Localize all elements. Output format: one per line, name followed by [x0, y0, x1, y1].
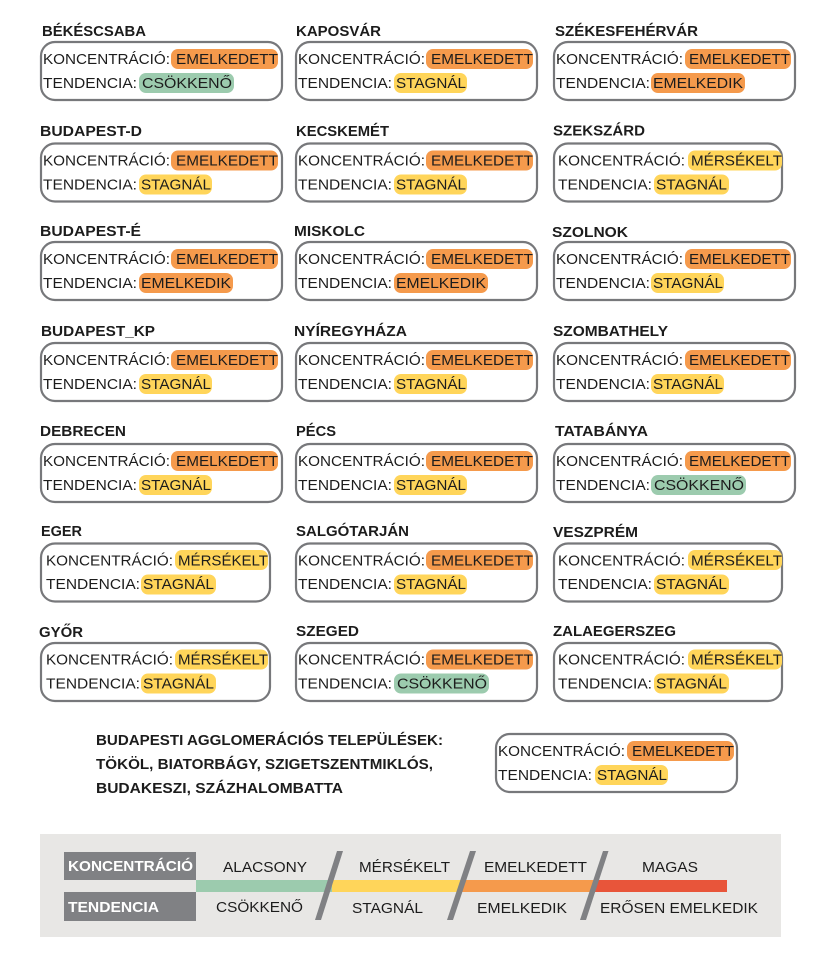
- card: Kecskemét: KECSKEMÉT: [296, 123, 389, 140]
- legend labels: elevated: [477, 859, 587, 917]
- legend labels: moderate: STAGNÁL: [352, 900, 423, 917]
- card: Eger: [41, 524, 270, 602]
- card: Pécs: TENDENCIA:: [298, 477, 392, 494]
- card: Székesfehérvár: TENDENCIA:: [556, 75, 650, 92]
- card: Székesfehérvár: SZÉKESFEHÉRVÁR: [555, 23, 699, 40]
- card: Győr: [39, 623, 270, 701]
- legend row header: koncentráció: KONCENTRÁCIÓ: [68, 857, 193, 875]
- legend row header: koncentráció: [64, 852, 196, 880]
- card: Debrecen: DEBRECEN: [40, 424, 126, 440]
- card: Debrecen: KONCENTRÁCIÓ:: [43, 453, 170, 470]
- card: Tatabánya: TATABÁNYA: [555, 423, 649, 440]
- card: Szeged: [296, 624, 537, 701]
- card: Salgótarján: TENDENCIA:: [298, 576, 392, 593]
- card: Miskolc: MISKOLC: [294, 224, 366, 240]
- card: Pécs: [296, 423, 537, 502]
- legend separators: [315, 851, 608, 920]
- card: Veszprém: STAGNÁL: [656, 576, 727, 593]
- card: Budapest_KP: TENDENCIA:: [43, 376, 137, 393]
- card: Szekszárd: [553, 122, 782, 202]
- legend labels: low: ALACSONY: [223, 859, 307, 876]
- legend row header: tendencia: [64, 892, 196, 921]
- card: Debrecen: STAGNÁL: [141, 477, 211, 494]
- card: Szombathely: KONCENTRÁCIÓ:: [556, 352, 683, 369]
- card: Zalaegerszeg: STAGNÁL: [656, 676, 727, 692]
- card: Salgótarján: SALGÓTARJÁN: [296, 522, 409, 540]
- card: Miskolc: EMELKEDIK: [396, 275, 486, 292]
- card: Budapest-D: [40, 124, 282, 202]
- card: Győr: STAGNÁL: [143, 676, 214, 692]
- card: Győr: KONCENTRÁCIÓ:: [46, 652, 173, 668]
- card: Nyíregyháza: NYÍREGYHÁZA: [294, 323, 408, 340]
- card: Pécs: KONCENTRÁCIÓ:: [298, 453, 425, 470]
- card: Székesfehérvár: EMELKEDETT: [689, 51, 790, 68]
- card: Budapest-D: KONCENTRÁCIÓ:: [43, 152, 170, 170]
- card: Budapest-D: EMELKEDETT: [176, 152, 278, 170]
- card: Budapest-D: STAGNÁL: [141, 176, 211, 194]
- card: Székesfehérvár: KONCENTRÁCIÓ:: [556, 51, 683, 68]
- card: Nyíregyháza: STAGNÁL: [396, 376, 466, 393]
- card: Szolnok: KONCENTRÁCIÓ:: [556, 251, 683, 268]
- card: Békéscsaba: EMELKEDETT: [176, 51, 278, 68]
- card: Szolnok: SZOLNOK: [552, 225, 629, 241]
- card: Eger: EGER: [41, 524, 83, 540]
- card: Budapest_KP: BUDAPEST_KP: [41, 324, 155, 340]
- card: Kecskemét: [296, 123, 537, 202]
- card: Győr: TENDENCIA:: [46, 676, 140, 692]
- card: Zalaegerszeg: KONCENTRÁCIÓ:: [558, 652, 685, 668]
- card: Zalaegerszeg: ZALAEGERSZEG: [553, 624, 676, 640]
- card: Veszprém: MÉRSÉKELT: [691, 552, 782, 570]
- card: Budapest-D: TENDENCIA:: [43, 176, 137, 194]
- card: Budapest-É: KONCENTRÁCIÓ:: [43, 251, 170, 268]
- card: Zalaegerszeg: [553, 624, 782, 701]
- card: Nyíregyháza: EMELKEDETT: [431, 352, 533, 369]
- card: Tatabánya: KONCENTRÁCIÓ:: [556, 453, 683, 470]
- card: Nyíregyháza: TENDENCIA:: [298, 376, 392, 393]
- card: Nyíregyháza: KONCENTRÁCIÓ:: [298, 352, 425, 369]
- card: Békéscsaba: CSÖKKENŐ: [142, 74, 232, 92]
- legend labels: moderate: MÉRSÉKELT: [359, 859, 450, 876]
- card: Miskolc: [294, 224, 537, 300]
- card: Budapest_KP: KONCENTRÁCIÓ:: [43, 352, 170, 369]
- card: Miskolc: KONCENTRÁCIÓ:: [298, 251, 425, 268]
- card: Debrecen: [40, 424, 282, 502]
- card: agglomeration status: [496, 734, 737, 792]
- card: Tatabánya: EMELKEDETT: [689, 453, 790, 470]
- card: Eger: STAGNÁL: [143, 576, 214, 593]
- card: Békéscsaba: KONCENTRÁCIÓ:: [43, 51, 170, 68]
- legend labels: low: [216, 859, 307, 916]
- card: Szekszárd: KONCENTRÁCIÓ:: [558, 152, 685, 170]
- card: Miskolc: EMELKEDETT: [431, 251, 533, 268]
- card: Budapest-D: BUDAPEST-D: [40, 124, 142, 140]
- card: Zalaegerszeg: MÉRSÉKELT: [691, 652, 782, 668]
- card: agglomeration status: TENDENCIA:: [498, 767, 592, 784]
- legend colour scale bar: [196, 880, 727, 892]
- card: Budapest-É: EMELKEDIK: [141, 275, 231, 292]
- card: Szolnok: STAGNÁL: [653, 275, 723, 292]
- card: Székesfehérvár: [554, 23, 795, 100]
- legend panel: [40, 834, 781, 937]
- card: Kaposvár: [296, 23, 537, 100]
- text block: Budapest agglomeration towns: BUDAKESZI, SZÁZHALOMBATTA: [96, 780, 344, 797]
- card: Szekszárd: TENDENCIA:: [558, 176, 652, 194]
- card: Veszprém: VESZPRÉM: [553, 524, 638, 541]
- legend labels: elevated: EMELKEDIK: [477, 900, 567, 917]
- card: Budapest_KP: STAGNÁL: [141, 376, 211, 393]
- card: Kecskemét: EMELKEDETT: [431, 152, 533, 170]
- card: Szombathely: STAGNÁL: [653, 376, 723, 393]
- card: Kecskemét: TENDENCIA:: [298, 176, 392, 194]
- card: Eger: TENDENCIA:: [46, 576, 140, 593]
- card: Tatabánya: CSÖKKENŐ: [654, 476, 744, 494]
- card: agglomeration status: STAGNÁL: [597, 767, 667, 784]
- card: Győr: GYŐR: [39, 623, 84, 641]
- card: Eger: MÉRSÉKELT: [178, 552, 268, 570]
- card: Szolnok: EMELKEDETT: [689, 251, 790, 268]
- card: Szombathely: TENDENCIA:: [556, 376, 650, 393]
- card: Tatabánya: TENDENCIA:: [556, 477, 650, 494]
- card: Budapest-É: BUDAPEST-É: [40, 223, 141, 240]
- text block: Budapest agglomeration towns: BUDAPESTI AGGLOMERÁCIÓS TELEPÜLÉSEK:: [96, 731, 443, 749]
- legend labels: low: CSÖKKENŐ: [216, 898, 303, 916]
- card: Kaposvár: KAPOSVÁR: [296, 23, 382, 40]
- card: Szombathely: SZOMBATHELY: [553, 324, 668, 340]
- card: Miskolc: TENDENCIA:: [298, 275, 392, 292]
- card: Szekszárd: SZEKSZÁRD: [553, 122, 645, 140]
- card: Szekszárd: MÉRSÉKELT: [691, 152, 782, 170]
- card: Veszprém: [553, 524, 782, 602]
- card: Salgótarján: [296, 522, 537, 602]
- card: Békéscsaba: [41, 23, 282, 100]
- card: Pécs: EMELKEDETT: [431, 453, 533, 470]
- card: Szombathely: [553, 324, 795, 401]
- card: Budapest-É: TENDENCIA:: [43, 275, 137, 292]
- legend labels: high: MAGAS: [642, 859, 698, 876]
- card: Szeged: KONCENTRÁCIÓ:: [298, 652, 425, 668]
- card: Debrecen: TENDENCIA:: [43, 477, 137, 494]
- text block: Budapest agglomeration towns: TÖKÖL, BIATORBÁGY, SZIGETSZENTMIKLÓS,: [96, 755, 433, 773]
- card: Salgótarján: KONCENTRÁCIÓ:: [298, 552, 425, 570]
- card: Kaposvár: TENDENCIA:: [298, 75, 392, 92]
- card: Szombathely: EMELKEDETT: [689, 352, 790, 369]
- card: Kaposvár: EMELKEDETT: [431, 51, 533, 68]
- card: Győr: MÉRSÉKELT: [178, 652, 268, 668]
- legend labels: elevated: EMELKEDETT: [484, 859, 587, 876]
- card: Zalaegerszeg: TENDENCIA:: [558, 676, 652, 692]
- legend row header: tendencia: TENDENCIA: [68, 899, 159, 916]
- card: Kaposvár: KONCENTRÁCIÓ:: [298, 51, 425, 68]
- card: Nyíregyháza: [294, 323, 537, 401]
- legend labels: high: [600, 859, 758, 917]
- card: Szeged: TENDENCIA:: [298, 676, 392, 692]
- card: Kecskemét: KONCENTRÁCIÓ:: [298, 152, 425, 170]
- card: Tatabánya: [554, 423, 795, 502]
- card: Budapest_KP: EMELKEDETT: [176, 352, 278, 369]
- text block: Budapest agglomeration towns: [96, 731, 443, 797]
- card: Veszprém: KONCENTRÁCIÓ:: [558, 552, 685, 570]
- card: Szeged: SZEGED: [296, 624, 359, 640]
- card: Szekszárd: STAGNÁL: [656, 176, 727, 194]
- card: Kaposvár: STAGNÁL: [396, 75, 466, 92]
- card: Debrecen: EMELKEDETT: [176, 453, 278, 470]
- card: Szolnok: TENDENCIA:: [556, 275, 650, 292]
- card: Szeged: CSÖKKENŐ: [397, 674, 487, 692]
- card: agglomeration status: KONCENTRÁCIÓ:: [498, 743, 625, 760]
- card: Pécs: STAGNÁL: [396, 477, 466, 494]
- card: Budapest-É: EMELKEDETT: [176, 251, 278, 268]
- card: Székesfehérvár: EMELKEDIK: [653, 75, 743, 92]
- legend labels: high: ERŐSEN EMELKEDIK: [600, 900, 758, 917]
- card: Eger: KONCENTRÁCIÓ:: [46, 552, 173, 570]
- card: Budapest_KP: [41, 324, 282, 401]
- card: Veszprém: TENDENCIA:: [558, 576, 652, 593]
- card: Budapest-É: [40, 223, 282, 300]
- legend labels: moderate: [352, 859, 450, 917]
- card: Békéscsaba: TENDENCIA:: [43, 75, 137, 92]
- card: Szolnok: [552, 225, 795, 300]
- card: Kecskemét: STAGNÁL: [396, 176, 466, 194]
- card: agglomeration status: EMELKEDETT: [632, 743, 734, 760]
- card: Salgótarján: EMELKEDETT: [431, 552, 533, 570]
- card: Békéscsaba: BÉKÉSCSABA: [42, 23, 147, 40]
- card: Pécs: PÉCS: [296, 423, 336, 440]
- card: Szeged: EMELKEDETT: [431, 652, 533, 668]
- card: Salgótarján: STAGNÁL: [396, 576, 466, 593]
